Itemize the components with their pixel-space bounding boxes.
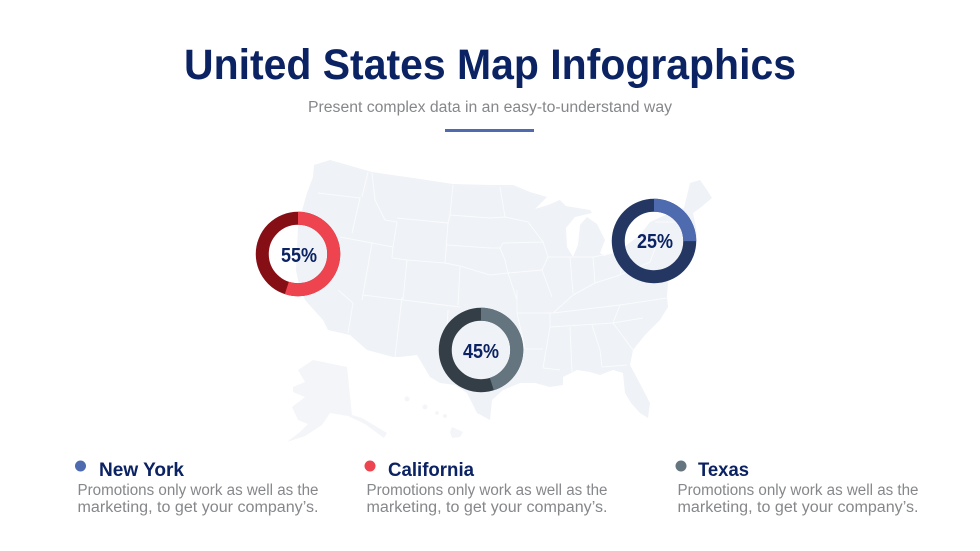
legend item: California <box>364 460 608 516</box>
Hawaii <box>404 396 463 438</box>
legend item: Texas <box>676 460 918 516</box>
Alaska <box>287 360 387 442</box>
subtitle: Present complex data in an easy-to-understand way <box>308 99 672 116</box>
donut chart: Texas 45% <box>445 314 517 386</box>
legend item: New York: marketing, to get your company’s. <box>78 499 318 516</box>
legend item: New York <box>75 460 318 516</box>
map of the United States <box>287 160 712 442</box>
donut chart: New York 25% <box>618 205 690 277</box>
donut chart: California 55% <box>262 218 334 290</box>
legend item: New York: Promotions only work as well as the <box>78 482 318 499</box>
title: United States Map Infographics <box>184 41 796 89</box>
donut chart: Texas 45%: 45% <box>463 341 499 363</box>
legend item: Texas: Texas <box>698 460 749 481</box>
legend item: Texas: Promotions only work as well as the <box>678 482 918 499</box>
contiguous states <box>296 160 712 420</box>
state borders <box>318 172 680 372</box>
title underline <box>445 129 534 132</box>
legend item: California: Promotions only work as well as the <box>366 482 608 499</box>
donut chart: New York 25%: 25% <box>637 231 673 253</box>
legend item: Texas: marketing, to get your company’s. <box>678 499 918 516</box>
donut chart: California 55%: 55% <box>281 245 317 267</box>
legend item: New York: New York <box>99 460 184 481</box>
legend item: California: marketing, to get your company’s. <box>366 499 608 516</box>
legend item: California: California <box>388 460 474 481</box>
